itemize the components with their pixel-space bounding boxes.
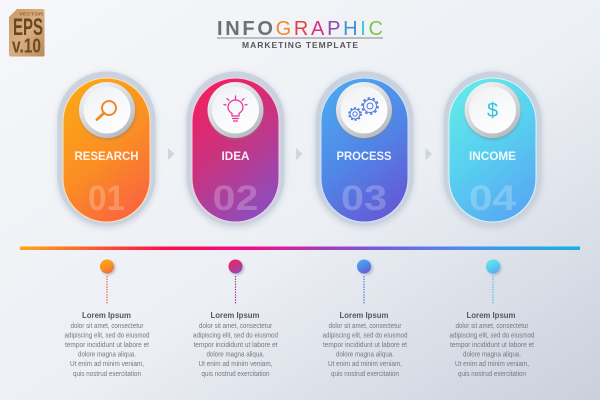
arrow 3 bbox=[426, 148, 432, 160]
column 3: marker and text: Ut enim ad minim veniam, bbox=[328, 361, 402, 368]
column 1: marker and text: Lorem Ipsum bbox=[82, 310, 131, 320]
column 1: marker and text: dolor sit amet, consectetur bbox=[70, 323, 144, 330]
column 1: marker and text: tempor incididunt ut labore et bbox=[65, 342, 149, 349]
panel: income: 04 bbox=[469, 179, 517, 218]
column 2: marker and text: Lorem Ipsum bbox=[210, 310, 260, 320]
icon: dollar bbox=[464, 82, 521, 140]
column 4: marker and text: quis nostrud exercitation bbox=[458, 371, 526, 378]
icon: dollar: $ bbox=[487, 100, 498, 122]
panel: idea: IDEA bbox=[222, 151, 250, 163]
column 2: marker and text: dolor sit amet, consectetur bbox=[199, 323, 273, 330]
panel: process bbox=[315, 72, 414, 228]
badge: EPS v.10 bbox=[9, 9, 44, 58]
column 3: marker and text: tempor incididunt ut labore et bbox=[323, 342, 407, 349]
column 4: marker and text: Ut enim ad minim veniam, bbox=[455, 361, 529, 368]
column 3: marker and text: adipiscing elit, sed do eiusmod bbox=[322, 332, 408, 340]
column 1: marker and text: quis nostrud exercitation bbox=[73, 371, 141, 378]
panel: income: INCOME bbox=[469, 151, 516, 163]
badge: EPS v.10: EPS bbox=[13, 14, 43, 41]
panel: research: RESEARCH bbox=[74, 151, 138, 163]
icon: light bulb bbox=[208, 82, 264, 140]
panel: idea: 02 bbox=[212, 179, 258, 218]
column 1: marker and text: adipiscing elit, sed do eiusmod bbox=[64, 332, 150, 340]
panel: income bbox=[443, 72, 542, 228]
column 4: marker and text: adipiscing elit, sed do eiusmod bbox=[450, 332, 535, 340]
panel: process: PROCESS bbox=[336, 151, 392, 163]
icon: magnifier bbox=[79, 82, 136, 140]
column 2: marker and text: adipiscing elit, sed do eiusmod bbox=[193, 332, 278, 340]
arrow 2 bbox=[296, 148, 302, 160]
column 3: marker and text: Lorem Ipsum bbox=[340, 310, 389, 320]
icon: gears bbox=[336, 82, 392, 140]
column 3: marker and text: dolore magna aliqua. bbox=[336, 352, 394, 358]
column 4: marker and text bbox=[450, 260, 535, 378]
column 4: marker and text: tempor incididunt ut labore et bbox=[450, 342, 534, 349]
title: INFOGRAPHIC MARKETING TEMPLATE: MARKETING TEMPLATE bbox=[242, 40, 358, 50]
column 1: marker and text: dolore magna aliqua. bbox=[78, 352, 136, 358]
badge: EPS v.10: v.10 bbox=[12, 36, 41, 58]
title: INFOGRAPHIC MARKETING TEMPLATE: INFOGRAPHIC bbox=[217, 18, 383, 40]
column 2: marker and text: dolore magna aliqua. bbox=[206, 352, 265, 358]
panel: process: 03 bbox=[341, 179, 387, 218]
column 2: marker and text bbox=[193, 260, 278, 378]
column 4: marker and text: dolor sit amet, consectetur bbox=[456, 323, 529, 330]
panel: research: 01 bbox=[88, 179, 125, 218]
arrow 1 bbox=[168, 148, 174, 160]
badge: EPS v.10: VECTOR bbox=[19, 12, 44, 16]
column 2: marker and text: Ut enim ad minim veniam, bbox=[198, 361, 273, 368]
panel: research bbox=[57, 72, 156, 228]
column 1: marker and text: Ut enim ad minim veniam, bbox=[70, 361, 144, 368]
column 4: marker and text: dolore magna aliqua. bbox=[463, 352, 521, 358]
column 2: marker and text: tempor incididunt ut labore et bbox=[194, 342, 278, 349]
column 3: marker and text: quis nostrud exercitation bbox=[331, 371, 399, 378]
panel: idea bbox=[186, 72, 285, 228]
column 2: marker and text: quis nostrud exercitation bbox=[202, 371, 270, 378]
column 3: marker and text: dolor sit amet, consectetur bbox=[328, 323, 402, 330]
column 4: marker and text: Lorem Ipsum bbox=[466, 310, 516, 320]
column 3: marker and text bbox=[322, 260, 408, 378]
column 1: marker and text bbox=[64, 260, 150, 378]
timeline gradient line bbox=[20, 246, 580, 250]
title: INFOGRAPHIC MARKETING TEMPLATE bbox=[217, 18, 383, 50]
